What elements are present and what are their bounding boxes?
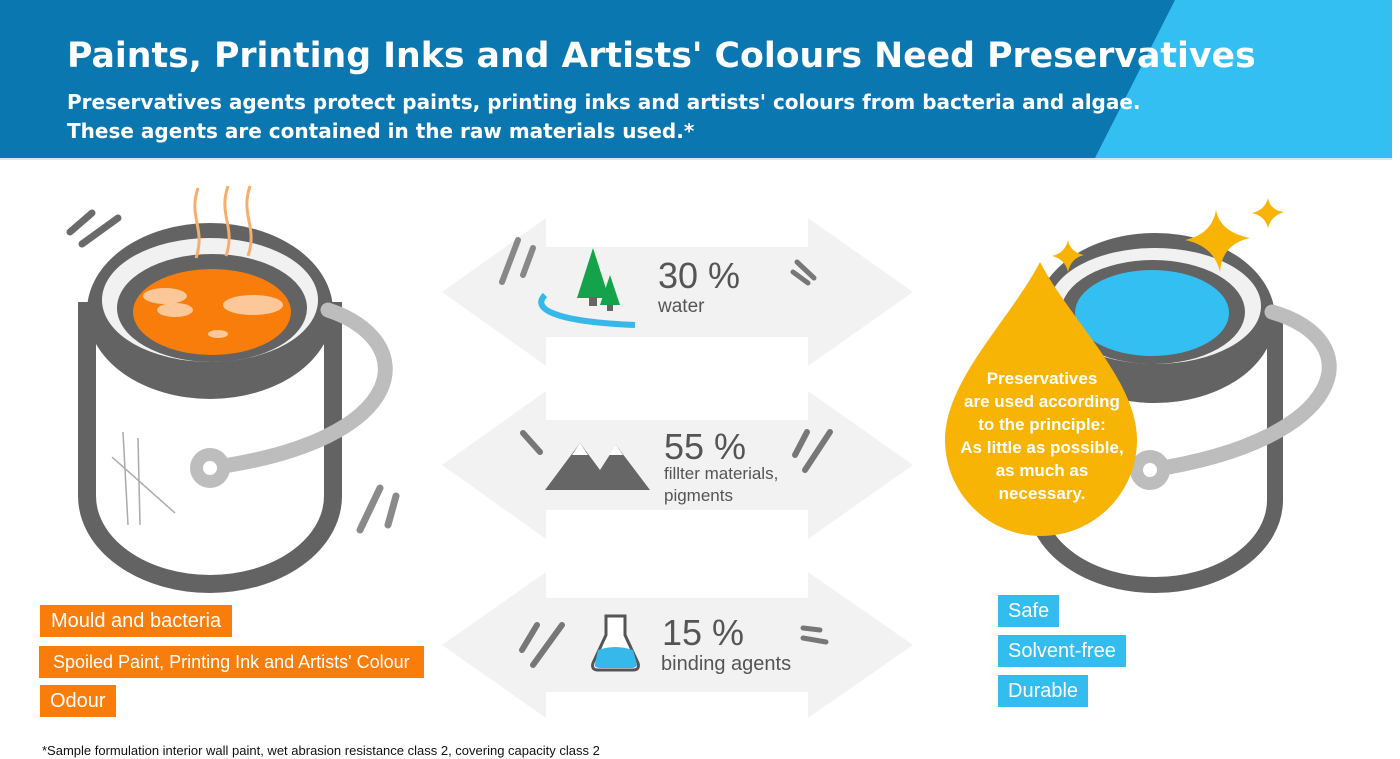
text: 30% water: 30 % (658, 255, 740, 296)
tag: solvent-free: Solvent-free (1008, 640, 1116, 662)
icon: flask (593, 616, 638, 670)
icon: stars (1052, 198, 1284, 272)
footnote: *Sample formulation interior wall paint, wet abrasion resistance class 2, covering capacity class 2 (42, 743, 600, 758)
text: 30% water: water (657, 296, 705, 317)
arrow: binding agents (442, 572, 913, 718)
right bucket (1035, 198, 1329, 585)
icon: trees and river (541, 248, 635, 325)
callout: preservative drop: to the principle: (978, 415, 1106, 434)
tag: spoiled (39, 646, 424, 678)
subtitle: These agents are contained in the raw materials used.* (67, 119, 694, 143)
tag: odour: Odour (50, 690, 106, 712)
text: 15% binding (661, 612, 791, 675)
tag: spoiled: Spoiled Paint, Printing Ink and Artists' Colour (53, 652, 410, 672)
text: 15% binding: binding agents (661, 653, 791, 675)
tag: solvent-free (998, 635, 1126, 667)
text: 15% binding: 15 % (662, 612, 744, 653)
text: 55% fillers (664, 426, 778, 505)
text: 55% fillers: pigments (664, 486, 733, 505)
callout: preservative drop: as much as (996, 461, 1088, 480)
callout: preservative drop: As little as possible, (960, 438, 1124, 457)
arrow: water (442, 218, 913, 366)
callout: preservative drop (945, 262, 1137, 536)
tag: safe (998, 595, 1059, 627)
icon: mountains (545, 443, 650, 490)
title: Paints, Printing Inks and Artists' Colours Need Preservatives (67, 36, 1256, 76)
tag: safe: Safe (1008, 600, 1049, 622)
text: 55% fillers: 55 % (664, 426, 746, 467)
text: 55% fillers: fillter materials, (664, 464, 778, 483)
text: 30% water (657, 255, 740, 317)
subtitle (67, 90, 1141, 143)
arrow: fillers (442, 391, 913, 539)
callout: preservative drop: are used according (964, 392, 1120, 411)
left bucket (70, 186, 396, 584)
tag: odour (40, 685, 116, 717)
callout: preservative drop: Preservatives (987, 369, 1097, 388)
tag: mould (40, 605, 232, 637)
tag: durable: Durable (1008, 680, 1078, 702)
tag: mould: Mould and bacteria (51, 610, 221, 632)
subtitle: Preservatives agents protect paints, printing inks and artists' colours from bacteria and algae. (67, 90, 1141, 114)
tag: durable (998, 675, 1088, 707)
callout: preservative drop: necessary. (999, 484, 1085, 503)
header banner (0, 0, 1392, 160)
